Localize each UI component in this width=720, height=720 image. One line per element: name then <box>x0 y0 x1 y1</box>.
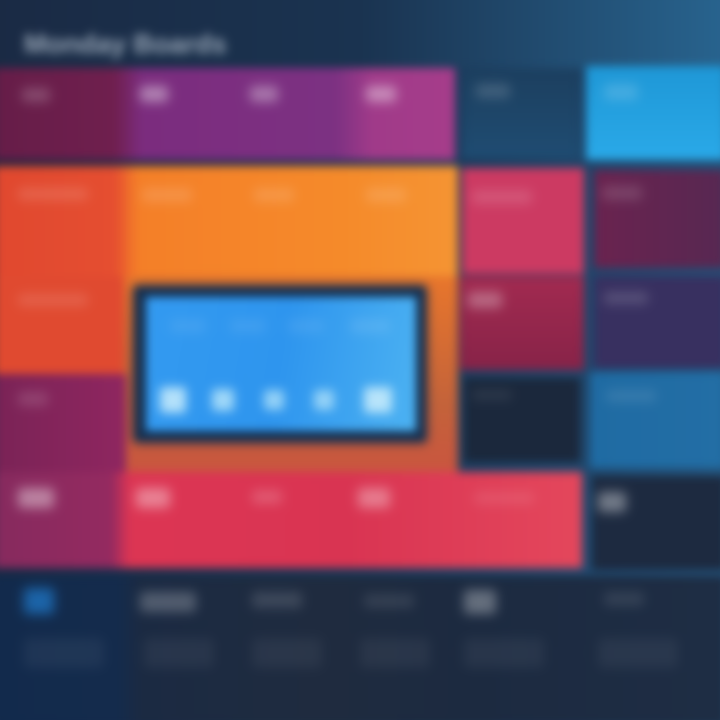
panel: right indigo cell <box>594 276 720 368</box>
panel: top row bright blue cell <box>586 66 720 160</box>
panel: red row <box>0 472 582 568</box>
panel: top row purple cells <box>0 68 455 160</box>
panel: right blue cell <box>590 372 720 468</box>
cell labels <box>18 78 402 110</box>
title: Monday Boards <box>24 29 227 59</box>
cell labels <box>17 184 408 206</box>
panel: maroon cell <box>460 276 584 370</box>
header band <box>0 0 720 68</box>
panel: orange surround of blue screen <box>124 276 458 472</box>
panel: dark center cell <box>464 378 580 462</box>
panel: orange block <box>0 166 458 280</box>
cell label <box>18 392 48 406</box>
cell label <box>18 294 88 306</box>
panel: right dark cell <box>592 476 720 570</box>
panel: central blue screen <box>134 286 426 442</box>
cell label <box>468 292 502 308</box>
panel: right plum cell <box>594 170 720 268</box>
cell labels <box>11 480 532 516</box>
cell label <box>472 190 532 204</box>
cell label <box>602 186 642 200</box>
panel: pink cell <box>462 168 584 274</box>
cell label <box>472 390 512 400</box>
panel: bottom row <box>0 576 720 720</box>
cell label <box>476 84 510 98</box>
panel: top row navy cell <box>462 70 580 158</box>
cell label <box>598 492 626 512</box>
cell label <box>604 292 648 304</box>
screen labels <box>173 318 388 334</box>
cell label <box>606 390 656 402</box>
panel: red left cell <box>0 276 124 374</box>
screen display <box>146 297 416 431</box>
bottom labels <box>16 580 674 666</box>
panel: purple left cell <box>0 374 126 472</box>
screen button row <box>152 380 400 420</box>
cell label <box>604 84 638 100</box>
